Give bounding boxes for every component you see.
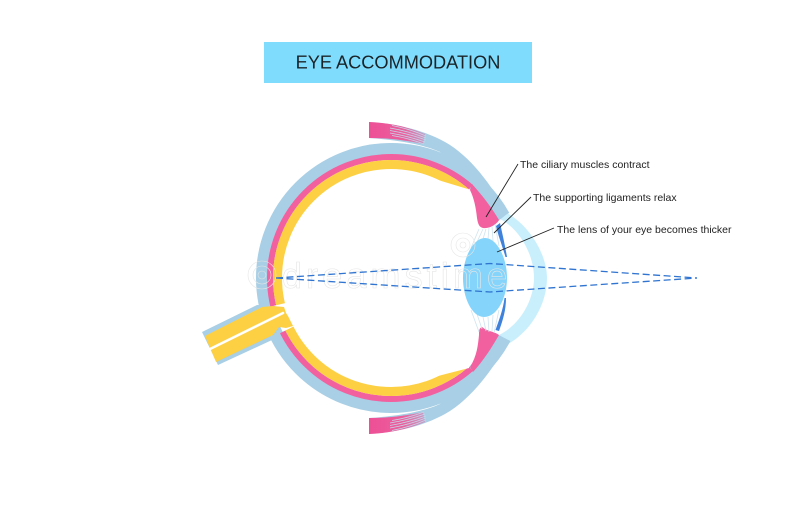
- optic nerve: [205, 306, 293, 362]
- callout: ciliary muscles: [486, 159, 650, 217]
- title banner: [264, 42, 532, 83]
- callout: lens: The lens of your eye becomes thicker: [557, 224, 732, 236]
- optic nerve divider: [208, 313, 283, 350]
- sclera: [263, 150, 519, 406]
- retina: [267, 154, 473, 402]
- lens: [463, 238, 507, 317]
- callout: supporting ligaments: [494, 192, 677, 233]
- upper eye muscle and tendon: [369, 122, 507, 222]
- iris lower: [496, 298, 506, 331]
- lower ciliary muscle: [470, 327, 499, 372]
- callout: supporting ligaments: The supporting ligaments relax: [533, 192, 677, 204]
- upper ciliary muscle: [470, 184, 499, 228]
- choroid taper masks: [438, 180, 471, 376]
- lower eye muscle and tendon: [369, 334, 507, 434]
- watermark: dreamstime: [282, 255, 507, 296]
- eye diagram: [202, 122, 697, 434]
- cornea: [498, 212, 547, 344]
- callout: lens: [497, 224, 732, 252]
- callout: ciliary muscles: The ciliary muscles contract: [520, 159, 650, 171]
- watermark: [248, 233, 507, 296]
- optic nerve sheath: [202, 305, 279, 365]
- supporting ligaments: [471, 224, 499, 333]
- focal lines: [276, 264, 697, 292]
- choroid: [273, 160, 469, 396]
- title banner: EYE ACCOMMODATION: [296, 52, 500, 72]
- iris upper: [496, 223, 507, 257]
